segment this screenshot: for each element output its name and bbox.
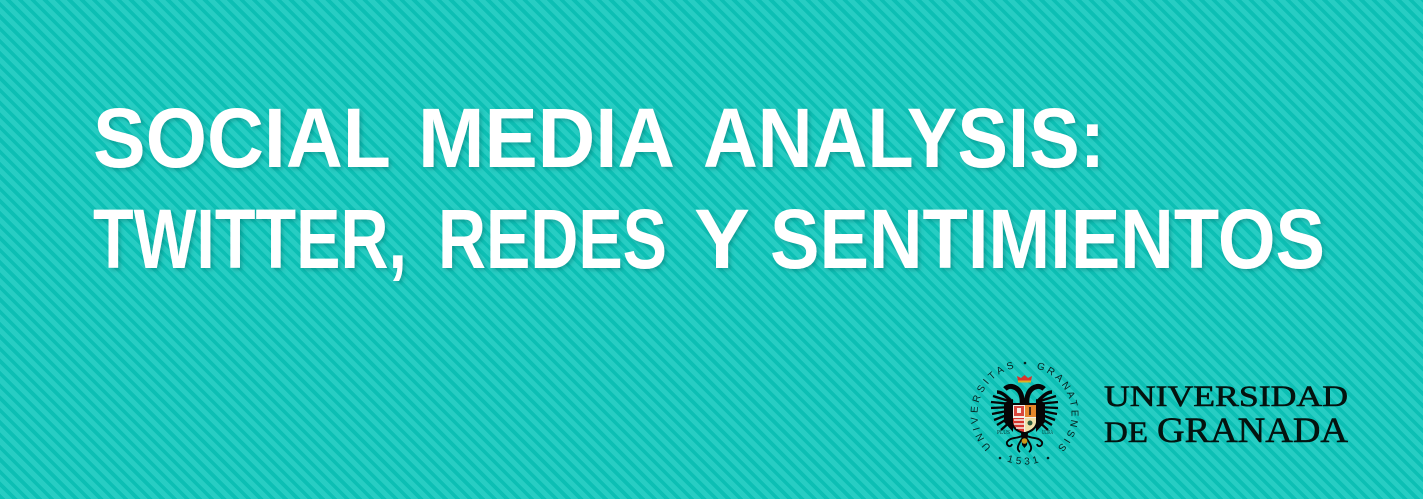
- title: Y: [694, 192, 750, 286]
- title: MEDIA: [418, 91, 675, 185]
- logo wordmark: GRANADA: [1157, 410, 1348, 450]
- title: REDES: [438, 192, 667, 286]
- logo wordmark: UNIVERSIDAD: [1104, 380, 1348, 413]
- seal ring text: UNIVERSITAS: [970, 362, 1014, 452]
- seal motto text: ULTRA: [1042, 429, 1053, 436]
- seal ring text: 1531: [1008, 456, 1038, 465]
- title: TWITTER,: [93, 192, 407, 286]
- seal ring text: GRANATENSIS: [1038, 362, 1078, 451]
- logo wordmark: [1104, 380, 1348, 450]
- icon: coat of arms shield: [1011, 403, 1038, 434]
- logo: Universidad de Granada seal: [970, 362, 1078, 465]
- title: [93, 91, 1325, 286]
- seal motto text: [997, 429, 1053, 436]
- icon: double-headed eagle: [991, 386, 1058, 452]
- icon: crown: [1017, 375, 1032, 382]
- logo wordmark: DE: [1104, 416, 1148, 449]
- seal ring text: [970, 362, 1078, 465]
- seal motto text: PLUS: [997, 429, 1010, 436]
- title: SOCIAL: [93, 91, 391, 185]
- title: ANALYSIS:: [703, 91, 1105, 185]
- title: SENTIMIENTOS: [770, 192, 1325, 286]
